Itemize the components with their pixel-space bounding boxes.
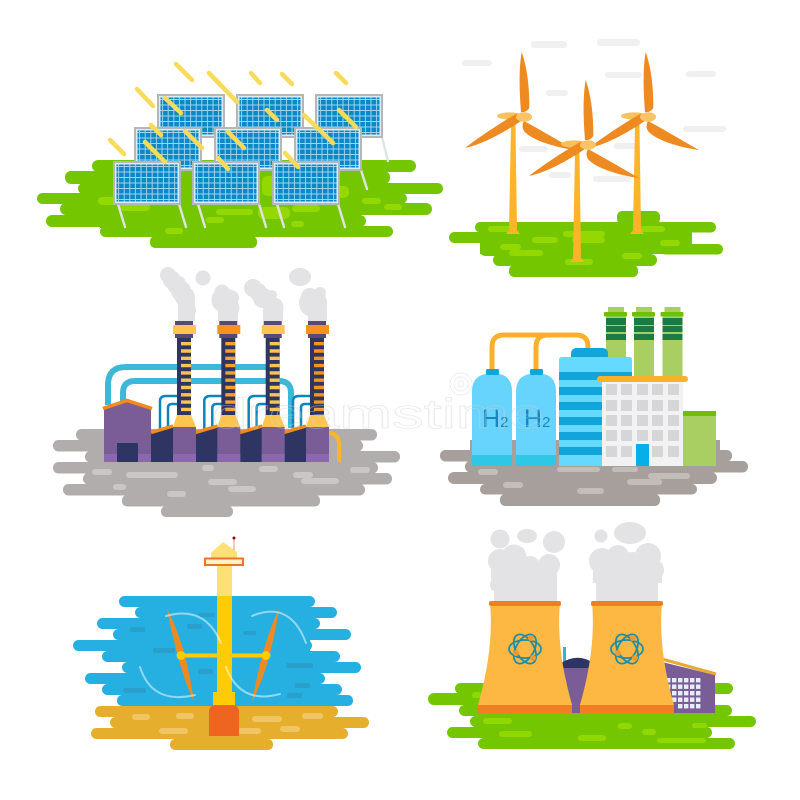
yellow outlet pipe bbox=[328, 433, 339, 462]
right blade bbox=[252, 609, 279, 702]
water bbox=[73, 596, 361, 706]
yellow connecting pipes bbox=[492, 335, 588, 371]
left blade bbox=[167, 609, 194, 702]
factory sheds bbox=[151, 425, 306, 462]
ground highlights: hydrogen bbox=[478, 467, 690, 494]
panel: hydrogen plant bbox=[440, 307, 748, 506]
hydrogen tank 2: H2 bbox=[524, 405, 550, 433]
solar panels middle row bbox=[134, 127, 362, 171]
panel: solar power bbox=[37, 64, 443, 248]
ground highlights: wind bbox=[488, 226, 680, 265]
green annex bbox=[683, 411, 716, 466]
ground highlights: solar bbox=[98, 176, 402, 234]
blue pipes bbox=[108, 367, 291, 428]
solar panels back row bbox=[157, 94, 383, 138]
chimney base blocks bbox=[173, 415, 329, 462]
wind turbine right bbox=[589, 52, 699, 234]
atom icon left bbox=[509, 631, 541, 667]
storage tank bbox=[559, 348, 632, 466]
wind turbine left bbox=[465, 52, 575, 234]
annex building bbox=[662, 659, 716, 713]
sand highlights bbox=[132, 713, 323, 734]
sand bbox=[91, 706, 369, 750]
cooling tower left bbox=[478, 601, 572, 713]
green chimneys bbox=[604, 307, 684, 378]
panel: nuclear power bbox=[428, 522, 756, 749]
chimney 4 bbox=[306, 321, 329, 416]
smoke left tower bbox=[488, 529, 565, 602]
chimney 3 bbox=[262, 321, 285, 416]
sun rays bbox=[110, 64, 356, 169]
crossbar bbox=[181, 654, 266, 658]
smoke right tower bbox=[589, 522, 664, 602]
blade hubs bbox=[176, 651, 270, 660]
water flow arcs bbox=[140, 612, 306, 697]
smoke plumes bbox=[160, 267, 327, 321]
grey ground: factory bbox=[53, 429, 400, 517]
chimney 1 bbox=[173, 321, 196, 416]
hydrogen tank 1: H2 bbox=[482, 405, 508, 433]
watermark: dreamstime bbox=[212, 390, 544, 437]
reactor funnel bbox=[561, 647, 592, 713]
green ground: solar bbox=[37, 160, 443, 248]
clouds bbox=[462, 39, 726, 182]
factory house bbox=[103, 400, 152, 462]
office building bbox=[597, 376, 688, 466]
panel: wind power bbox=[449, 39, 726, 277]
ground highlights: factory bbox=[92, 465, 370, 497]
panel legs bbox=[118, 137, 388, 227]
solar panels front row bbox=[113, 161, 340, 205]
panel: coal factory bbox=[53, 267, 400, 517]
water shadows bbox=[123, 613, 313, 698]
atom icon right bbox=[611, 631, 643, 667]
hydrogen tank 1 bbox=[472, 369, 512, 466]
chimney 2 bbox=[217, 321, 240, 416]
watermark bbox=[212, 373, 544, 437]
panel: tidal power bbox=[73, 536, 369, 750]
cooling tower right bbox=[580, 601, 674, 713]
grey ground: hydrogen bbox=[440, 440, 748, 506]
hydrogen tank 2 bbox=[516, 369, 556, 466]
green ground: nuclear bbox=[428, 683, 756, 749]
small pipes bbox=[160, 396, 311, 430]
wind turbine centre bbox=[529, 80, 639, 262]
tidal tower bbox=[205, 536, 243, 736]
ground highlights: nuclear bbox=[472, 692, 707, 743]
green ground: wind bbox=[449, 211, 723, 277]
